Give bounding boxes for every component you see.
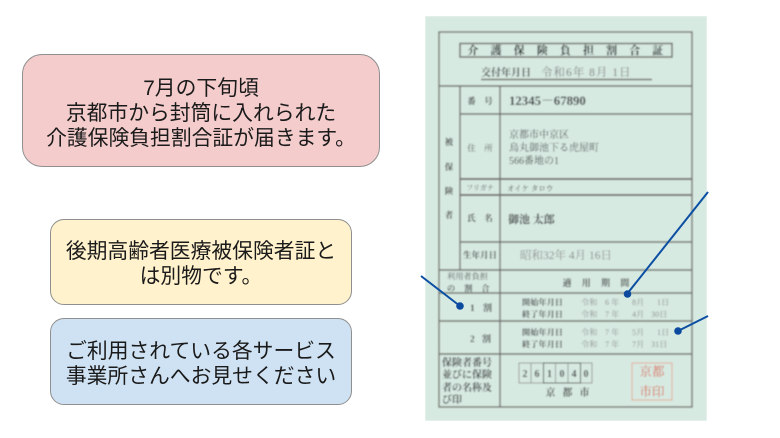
field values: 烏丸御池下る虎屋町 xyxy=(509,141,599,154)
insured side label: 保 xyxy=(445,162,454,172)
field values: 御池 太郎 xyxy=(508,212,555,226)
pointer: to 1 wari xyxy=(421,276,464,310)
insurer number boxes: 6 xyxy=(534,369,540,380)
burden ratio table: 利用者負担 xyxy=(447,271,488,281)
burden ratio table: 6 年 xyxy=(605,297,619,307)
callout: different from elderly insurance card (yellow): は別物です。 xyxy=(140,265,262,288)
field values: 566番地の1 xyxy=(509,154,559,167)
field values: オイケ タロウ xyxy=(507,184,553,193)
burden ratio table: 終了年月日 xyxy=(522,309,563,319)
burden ratio table: 終了年月日 xyxy=(522,339,563,349)
issue date: 令和6年 8月 1日 xyxy=(541,65,632,79)
callout: show to service providers (blue): ご利用されている各サービス xyxy=(66,340,336,363)
field labels: 番 号 xyxy=(467,96,493,106)
burden ratio table: 令和 xyxy=(581,297,597,307)
insurer section label: 並びに保険 xyxy=(442,368,492,381)
burden ratio table: 1日 xyxy=(657,328,669,337)
burden ratio table: 1 xyxy=(470,304,475,314)
red seal: 市印 xyxy=(639,384,665,399)
burden ratio table: 5月 xyxy=(632,328,644,337)
issue date: 交付年月日 xyxy=(481,66,531,79)
insurer number boxes: 1 xyxy=(547,369,552,380)
callout: arrival timing (pink): 7月の下旬頃 xyxy=(143,77,259,100)
field labels: 住 所 xyxy=(467,143,493,153)
burden ratio table: 31日 xyxy=(651,340,667,349)
red seal: 京都 xyxy=(639,364,665,379)
burden ratio table xyxy=(447,271,669,349)
callout: arrival timing (pink): 介護保険負担割合証が届きます。 xyxy=(46,127,356,150)
issue date xyxy=(481,65,632,79)
burden ratio table: 適用期間 xyxy=(562,277,640,288)
field labels: 生年月日 xyxy=(463,250,497,260)
field values xyxy=(507,94,612,262)
burden ratio table: 30日 xyxy=(651,310,667,319)
burden ratio table: 7 年 xyxy=(605,327,619,337)
insurer number boxes xyxy=(519,363,592,383)
burden ratio table: 割 xyxy=(481,333,491,344)
burden ratio table: 2 xyxy=(470,335,475,345)
insurer section label: 者の名称及 xyxy=(442,381,492,394)
insurer number boxes: 0 xyxy=(584,369,588,380)
burden ratio table: 令和 xyxy=(581,339,597,349)
field values: 京都市中京区 xyxy=(509,128,569,141)
burden ratio table: 8月 xyxy=(632,298,644,307)
field values: 昭和32年 4月 16日 xyxy=(520,248,612,262)
burden ratio table: 1日 xyxy=(657,298,669,307)
insurer section label xyxy=(442,356,492,406)
insured side label: 者 xyxy=(445,210,454,220)
callout: show to service providers (blue): 事業所さんへお見せください xyxy=(66,365,336,388)
pointer: to second period xyxy=(674,316,708,335)
insurer number boxes: 4 xyxy=(572,369,576,380)
insured side label: 険 xyxy=(445,186,454,196)
callout: show to service providers (blue) xyxy=(50,318,352,405)
insurer number boxes: 0 xyxy=(560,369,564,380)
red seal xyxy=(632,363,672,400)
burden ratio table: 令和 xyxy=(581,309,597,319)
burden ratio table: の割合 xyxy=(447,283,499,293)
certificate card xyxy=(425,16,707,421)
burden ratio table: 7 年 xyxy=(605,339,619,349)
certificate title: 介護保険負担割合証 xyxy=(468,43,675,57)
insurer number boxes: 2 xyxy=(522,369,528,380)
callout: arrival timing (pink): 京都市から封筒に入れられた xyxy=(66,102,336,125)
callout: arrival timing (pink) xyxy=(22,54,380,167)
insurer section label: び印 xyxy=(442,393,462,406)
burden ratio table: 7 年 xyxy=(605,309,619,319)
field labels: 氏 名 xyxy=(467,213,493,223)
callout: different from elderly insurance card (yellow): 後期高齢者医療被保険者証と xyxy=(66,240,336,263)
field labels: フリガナ xyxy=(466,184,494,192)
field values: 12345－67890 xyxy=(509,94,586,108)
burden ratio table: 4月 xyxy=(632,310,644,319)
burden ratio table: 7月 xyxy=(632,340,644,349)
callout: different from elderly insurance card (yellow) xyxy=(50,219,352,305)
insurer section label: 保険者番号 xyxy=(442,356,492,369)
burden ratio table: 開始年月日 xyxy=(522,297,563,307)
burden ratio table: 令和 xyxy=(581,327,597,337)
field labels xyxy=(463,96,497,260)
insurer name: 京都市 xyxy=(546,386,596,399)
pointer: to period start xyxy=(624,192,708,298)
insured side label: 被 xyxy=(445,137,454,147)
burden ratio table: 開始年月日 xyxy=(522,327,563,337)
burden ratio table: 割 xyxy=(482,302,492,313)
insured side label xyxy=(445,137,454,220)
